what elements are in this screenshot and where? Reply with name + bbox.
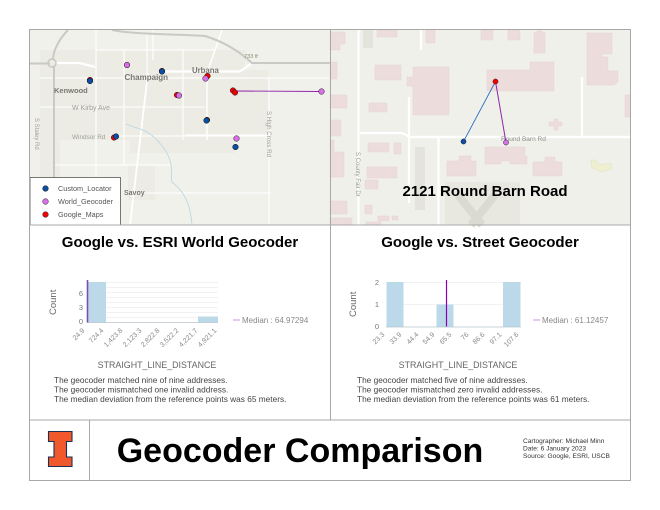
credits	[523, 438, 610, 460]
histogram: 2,822.8	[140, 327, 161, 349]
map labels: Windsor Rd	[72, 134, 106, 141]
panel: world geocoder chart	[48, 234, 309, 404]
chart notes: The geocoder matched nine of nine addresses.	[54, 375, 227, 385]
histogram: 724.4	[88, 327, 105, 345]
histogram: 86.6	[472, 331, 486, 346]
histogram: 54.9	[422, 331, 436, 346]
histogram: 97.1	[489, 331, 503, 346]
legend: Custom_Locator	[58, 184, 112, 193]
detail points	[461, 79, 509, 145]
Google Maps points	[87, 62, 238, 140]
histogram: 44.4	[406, 331, 420, 346]
World Geocoder points	[124, 62, 324, 141]
histogram: 1	[375, 300, 379, 309]
map labels	[33, 54, 272, 197]
chart notes: The geocoder matched five of nine addresses.	[357, 375, 528, 385]
Custom Locator points	[87, 69, 238, 150]
histogram: 33.9	[389, 331, 403, 346]
histogram: STRAIGHT_LINE_DISTANCE	[399, 360, 517, 370]
histogram: 2	[375, 278, 379, 287]
histogram: 3	[79, 303, 83, 312]
heading: Google vs. ESRI World Geocoder	[62, 234, 298, 251]
chart notes: The median deviation from the reference points was 65 meters.	[54, 394, 286, 404]
histogram: 65.5	[439, 331, 453, 346]
chart notes: The median deviation from the reference points was 61 meters.	[357, 394, 589, 404]
map labels: S Staley Rd	[33, 118, 39, 150]
histogram: Median : 61.12457	[542, 316, 609, 325]
chart notes: The geocoder mismatched zero invalid addresses.	[357, 384, 542, 394]
heading: Google vs. Street Geocoder	[381, 234, 579, 251]
histogram	[48, 280, 309, 370]
legend: World_Geocoder	[58, 197, 114, 206]
legend: Google_Maps	[58, 210, 104, 219]
histogram: 24.9	[72, 327, 86, 342]
main title: Geocoder Comparison	[117, 432, 483, 470]
histogram: 3,522.2	[159, 327, 180, 349]
histogram: Median : 64.97294	[242, 316, 309, 325]
histogram: 23.3	[372, 331, 386, 346]
histogram: 4,921.1	[197, 327, 218, 349]
map labels: Champaign	[124, 73, 168, 82]
panel: detail map	[330, 30, 630, 225]
chart notes	[357, 375, 589, 404]
map labels: W Kirby Ave	[72, 105, 110, 112]
histogram: 6	[79, 289, 83, 298]
google and world connector line	[234, 90, 321, 92]
credits: Cartographer: Michael Minn	[523, 438, 605, 445]
map labels: Kenwood	[54, 86, 88, 95]
histogram: STRAIGHT_LINE_DISTANCE	[98, 360, 216, 370]
map labels: 733 ft	[244, 54, 258, 60]
map labels: S High Cross Rd	[265, 111, 272, 158]
map title: 2121 Round Barn Road	[402, 183, 568, 200]
connector lines	[464, 82, 506, 142]
histogram: 107.6	[503, 331, 520, 349]
label: S County Fair Dr: S County Fair Dr	[354, 152, 360, 197]
histogram: 76	[460, 331, 470, 342]
credits: Date: 6 January 2023	[523, 446, 586, 452]
histogram: 2,123.3	[122, 327, 143, 349]
map labels: Savoy	[124, 190, 145, 197]
histogram: 0	[375, 322, 379, 331]
icon: Illinois block I logo	[48, 432, 72, 466]
histogram: 1,423.8	[103, 327, 124, 349]
histogram: 0	[79, 317, 83, 326]
chart notes	[54, 375, 286, 404]
panel: street geocoder chart	[348, 234, 609, 404]
label: Round Barn Rd: Round Barn Rd	[501, 136, 546, 143]
histogram: Count	[48, 289, 59, 315]
chart notes: The geocoder mismatched one invalid address.	[54, 384, 228, 394]
panel: overview map	[30, 30, 330, 225]
credits: Source: Google, ESRI, USCB	[523, 453, 610, 460]
histogram: 4,221.7	[178, 327, 199, 349]
legend	[30, 178, 120, 225]
map labels: Urbana	[192, 66, 220, 75]
histogram	[348, 278, 609, 370]
histogram: Count	[348, 291, 359, 317]
